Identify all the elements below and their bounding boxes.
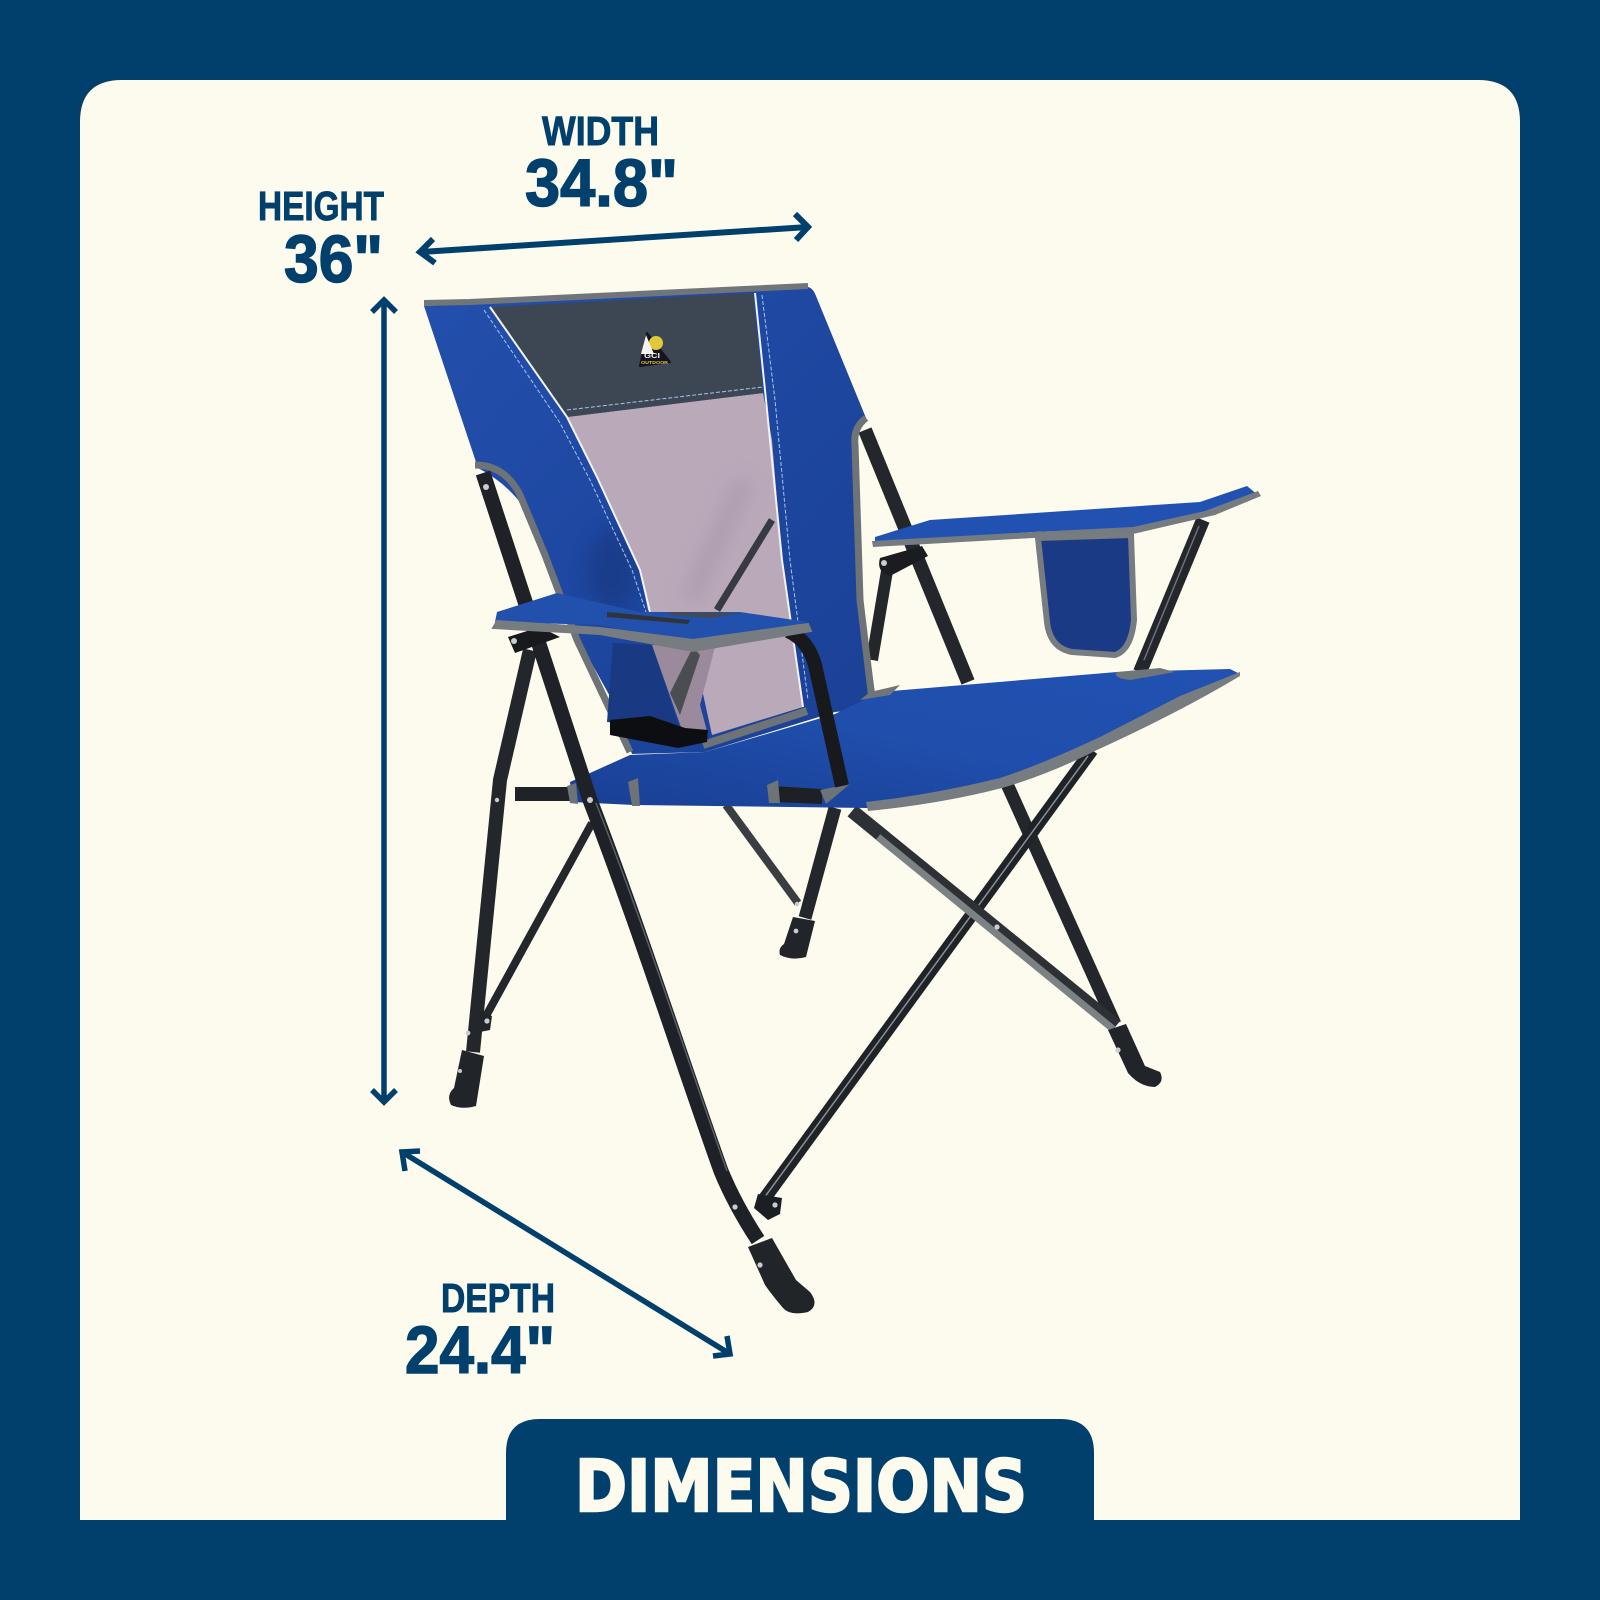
rear frame and legs bbox=[473, 430, 1203, 1202]
title tab bbox=[506, 1419, 1094, 1528]
front right foot bbox=[1108, 1024, 1162, 1087]
cup holder mesh blue bbox=[607, 643, 680, 730]
right arm hinge bbox=[879, 546, 928, 576]
white seam lines bbox=[490, 293, 803, 707]
bottom trim bbox=[703, 711, 807, 745]
seat rear tabs bbox=[860, 668, 1175, 700]
cup holder mesh pink bbox=[652, 645, 715, 735]
back fold shadow bbox=[588, 530, 636, 610]
depth label: DEPTH bbox=[441, 1275, 555, 1321]
arm dark panel bbox=[667, 612, 740, 618]
inner brace through mesh bbox=[717, 520, 772, 610]
left arm trim bbox=[493, 621, 811, 651]
arm front support bbox=[788, 631, 842, 786]
bolts bbox=[458, 484, 1121, 1268]
chair photo illustration bbox=[424, 286, 1261, 1313]
right arm pad bbox=[875, 486, 1258, 544]
depth value: 24.4" bbox=[405, 1313, 555, 1388]
mesh shadow bbox=[690, 480, 745, 600]
badge triangle bbox=[640, 333, 670, 366]
cup holder inner fold bbox=[670, 647, 700, 715]
chair back fabric bbox=[424, 286, 877, 754]
arm hinge bbox=[508, 627, 560, 653]
badge name: GCI bbox=[644, 353, 660, 360]
seat bottom bands bbox=[567, 778, 850, 806]
badge mountain bbox=[641, 335, 654, 354]
front left leg bbox=[483, 473, 758, 1240]
cup holder black base bbox=[610, 716, 708, 748]
front left foot bbox=[748, 1238, 815, 1313]
width value: 34.8" bbox=[525, 146, 678, 221]
height arrow bbox=[372, 300, 396, 1102]
seat surface bbox=[570, 669, 1240, 808]
brand badge bbox=[640, 333, 670, 366]
rear hinge bracket bbox=[754, 1194, 782, 1220]
stitching bbox=[484, 295, 808, 700]
blue back bbox=[424, 287, 877, 754]
drink pocket bbox=[1038, 535, 1134, 655]
strut bracket bbox=[480, 1012, 492, 1032]
left armrest group bbox=[493, 593, 842, 786]
dark header panel bbox=[490, 293, 763, 417]
arm strap bbox=[607, 612, 690, 624]
width label: WIDTH bbox=[542, 108, 659, 154]
seat frame gap bbox=[772, 786, 822, 804]
left arm pad bbox=[495, 593, 808, 648]
mesh panel bbox=[567, 393, 803, 735]
tab shape bbox=[506, 1419, 1094, 1520]
side trim bbox=[475, 418, 873, 752]
width arrow bbox=[420, 214, 808, 263]
top edge trim bbox=[424, 286, 808, 303]
rear right foot bbox=[780, 917, 815, 959]
seat front trim bbox=[866, 672, 1240, 811]
height label: HEIGHT bbox=[258, 183, 384, 229]
badge outdoor: OUTDOOR bbox=[641, 360, 669, 365]
badge sun bbox=[649, 336, 663, 350]
title text: DIMENSIONS bbox=[575, 1445, 1027, 1528]
height value: 36" bbox=[284, 222, 383, 297]
right arm trim bbox=[872, 491, 1261, 547]
depth arrow bbox=[402, 1151, 730, 1356]
seat fabric bbox=[567, 668, 1240, 811]
rear left foot bbox=[449, 1050, 484, 1108]
right armrest group bbox=[872, 486, 1261, 655]
